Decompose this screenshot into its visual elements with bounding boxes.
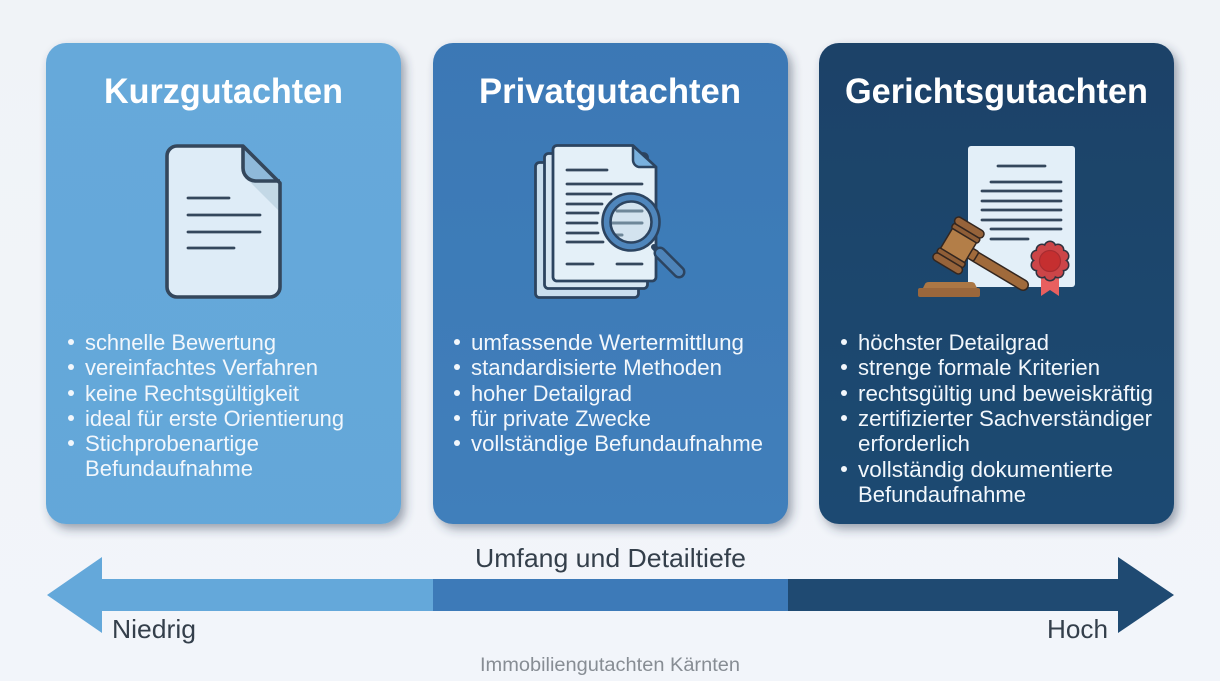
magnifier <box>602 194 679 272</box>
bullet list: Kurzgutachten: ideal für erste Orientierung <box>85 406 344 431</box>
label: Hoch: Hoch <box>1047 614 1108 644</box>
panel: Kurzgutachten <box>46 43 401 524</box>
label: Niedrig: Niedrig <box>112 614 196 644</box>
bullet list: Privatgutachten: standardisierte Methoden <box>471 355 722 380</box>
bullet list: Gerichtsgutachten: strenge formale Kriterien <box>858 355 1100 380</box>
icon: document stack with magnifier <box>536 146 679 298</box>
bullet list: Kurzgutachten: keine Rechtsgültigkeit <box>85 381 299 406</box>
panel: Gerichtsgutachten <box>819 43 1174 524</box>
axis label: Umfang und Detailtiefe <box>475 543 746 573</box>
gavel <box>918 216 1023 297</box>
bullet list: Gerichtsgutachten: höchster Detailgrad <box>858 330 1049 355</box>
icon: certificate with gavel and seal <box>918 146 1075 297</box>
bullet list: Privatgutachten: hoher Detailgrad <box>471 381 632 406</box>
double arrow: scope scale <box>47 557 1174 633</box>
bullet list: Privatgutachten: umfassende Wertermittlung <box>471 330 744 355</box>
bullet list: Kurzgutachten: vereinfachtes Verfahren <box>85 355 318 380</box>
bullet list: Gerichtsgutachten: Befundaufnahme <box>858 482 1026 507</box>
bullet list: Privatgutachten: für private Zwecke <box>471 406 651 431</box>
heading: Gerichtsgutachten: Gerichtsgutachten <box>845 71 1148 111</box>
bullet list: Kurzgutachten <box>68 330 344 481</box>
heading: Privatgutachten: Privatgutachten <box>479 71 741 111</box>
bullet list: Gerichtsgutachten: zertifizierter Sachverständiger <box>858 406 1152 431</box>
seal <box>1030 240 1070 296</box>
footer caption: Immobiliengutachten Kärnten <box>480 655 740 676</box>
bullet list: Privatgutachten: vollständige Befundaufnahme <box>471 431 763 456</box>
bullet list: Privatgutachten <box>454 330 763 456</box>
bullet list: Gerichtsgutachten: vollständig dokumentierte <box>858 457 1113 482</box>
bullet list: Kurzgutachten: Stichprobenartige <box>85 431 259 456</box>
icon: single document <box>167 146 280 297</box>
bullet list: Gerichtsgutachten <box>841 330 1153 507</box>
bullet list: Gerichtsgutachten: erforderlich <box>858 431 970 456</box>
bullet list: Gerichtsgutachten: rechtsgültig und beweiskräftig <box>858 381 1153 406</box>
bullet list: Kurzgutachten: Befundaufnahme <box>85 456 253 481</box>
bullet list: Kurzgutachten: schnelle Bewertung <box>85 330 276 355</box>
heading: Kurzgutachten: Kurzgutachten <box>104 71 343 111</box>
panel: Privatgutachten <box>433 43 788 524</box>
